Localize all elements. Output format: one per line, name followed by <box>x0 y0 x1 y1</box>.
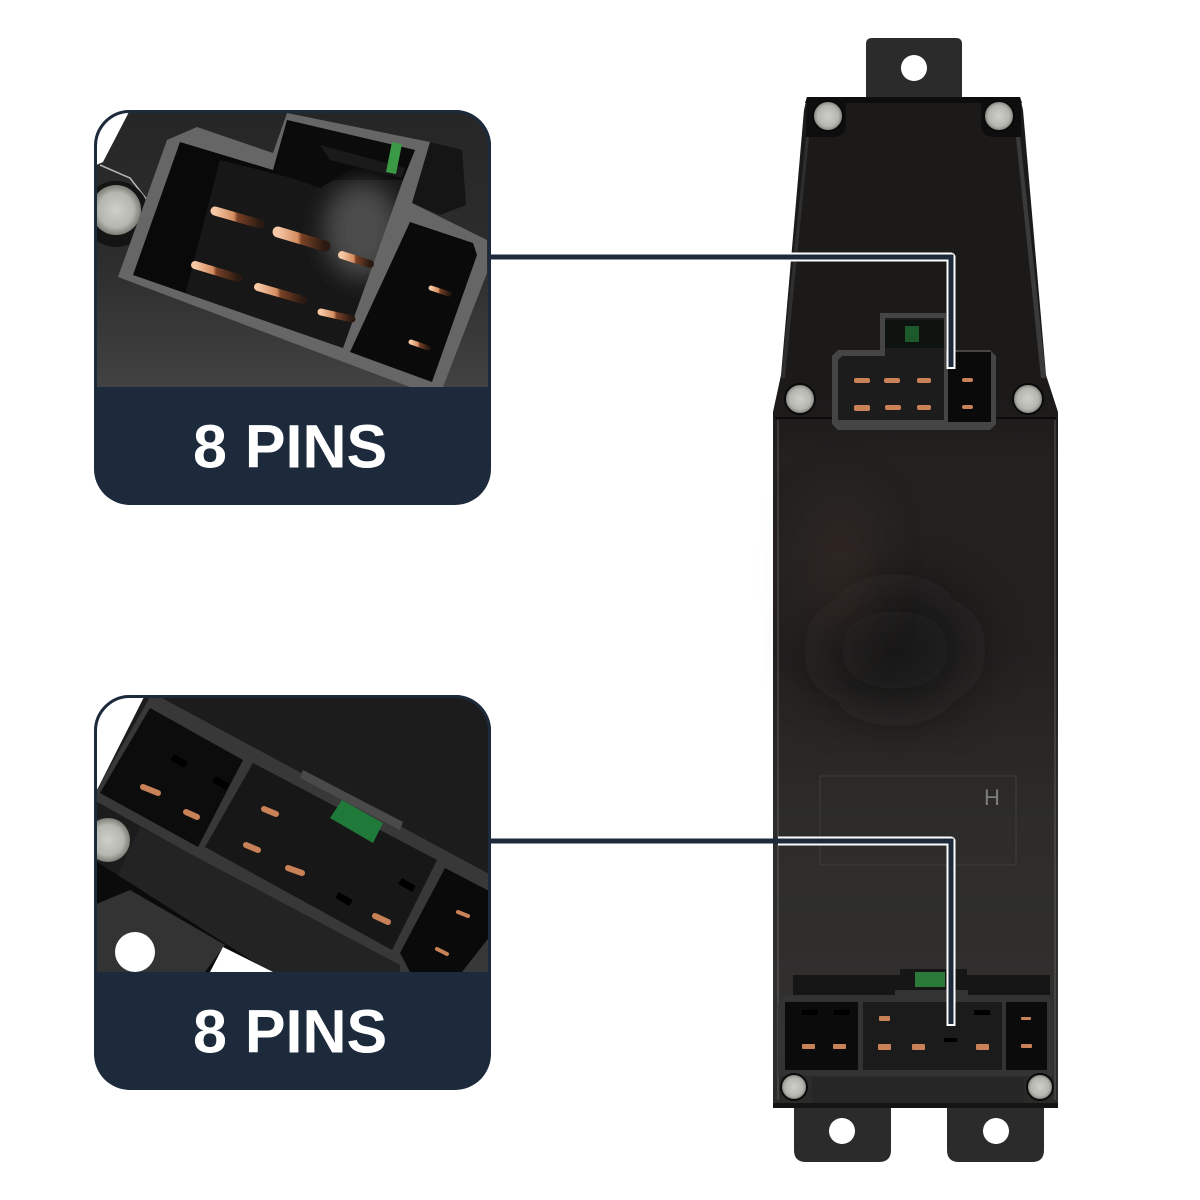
leader line: lower connector <box>491 841 951 1026</box>
upper connector pins <box>854 378 973 411</box>
screws <box>781 101 1053 1100</box>
top screw corners <box>806 103 1021 137</box>
moulded H mark <box>820 776 1016 865</box>
lower connector pins <box>802 1016 1032 1050</box>
bottom body strip <box>812 1077 1024 1103</box>
brown sheen <box>818 495 862 645</box>
pins <box>195 211 449 348</box>
label: 8 pins: 8 PINS <box>193 412 387 480</box>
panel base <box>94 695 491 1090</box>
close-up photo: lower connector <box>86 695 491 972</box>
bottom mounting tabs <box>794 1108 1044 1162</box>
upper connector <box>832 313 996 430</box>
top mounting tab <box>866 38 962 97</box>
callout panel: lower connector <box>86 695 491 1090</box>
body side rims <box>778 420 1055 1100</box>
bottom body edge <box>773 1103 1058 1108</box>
switch body <box>773 97 1058 1108</box>
top cap edge <box>805 97 1022 103</box>
infographic canvas <box>94 38 1058 1162</box>
empty slots <box>172 757 414 903</box>
panel base <box>94 110 491 505</box>
lower body seam <box>775 417 1056 419</box>
product: window switch rear view <box>773 38 1058 1162</box>
dark central blotch <box>820 590 970 710</box>
callout panel: upper connector <box>83 110 491 505</box>
close-up photo: upper connector <box>83 110 491 387</box>
pins <box>143 787 468 954</box>
left tapered rim <box>781 137 809 378</box>
leader line: upper connector <box>491 257 951 369</box>
photo border <box>96 112 490 387</box>
cavity floor <box>185 120 415 348</box>
right tapered rim <box>1016 137 1046 378</box>
lower connector <box>778 969 1053 1076</box>
label: 8 pins: 8 PINS <box>193 998 387 1066</box>
moulded H mark: H <box>984 785 1000 810</box>
photo border <box>96 696 490 972</box>
lower connector empty slots <box>802 1010 990 1042</box>
